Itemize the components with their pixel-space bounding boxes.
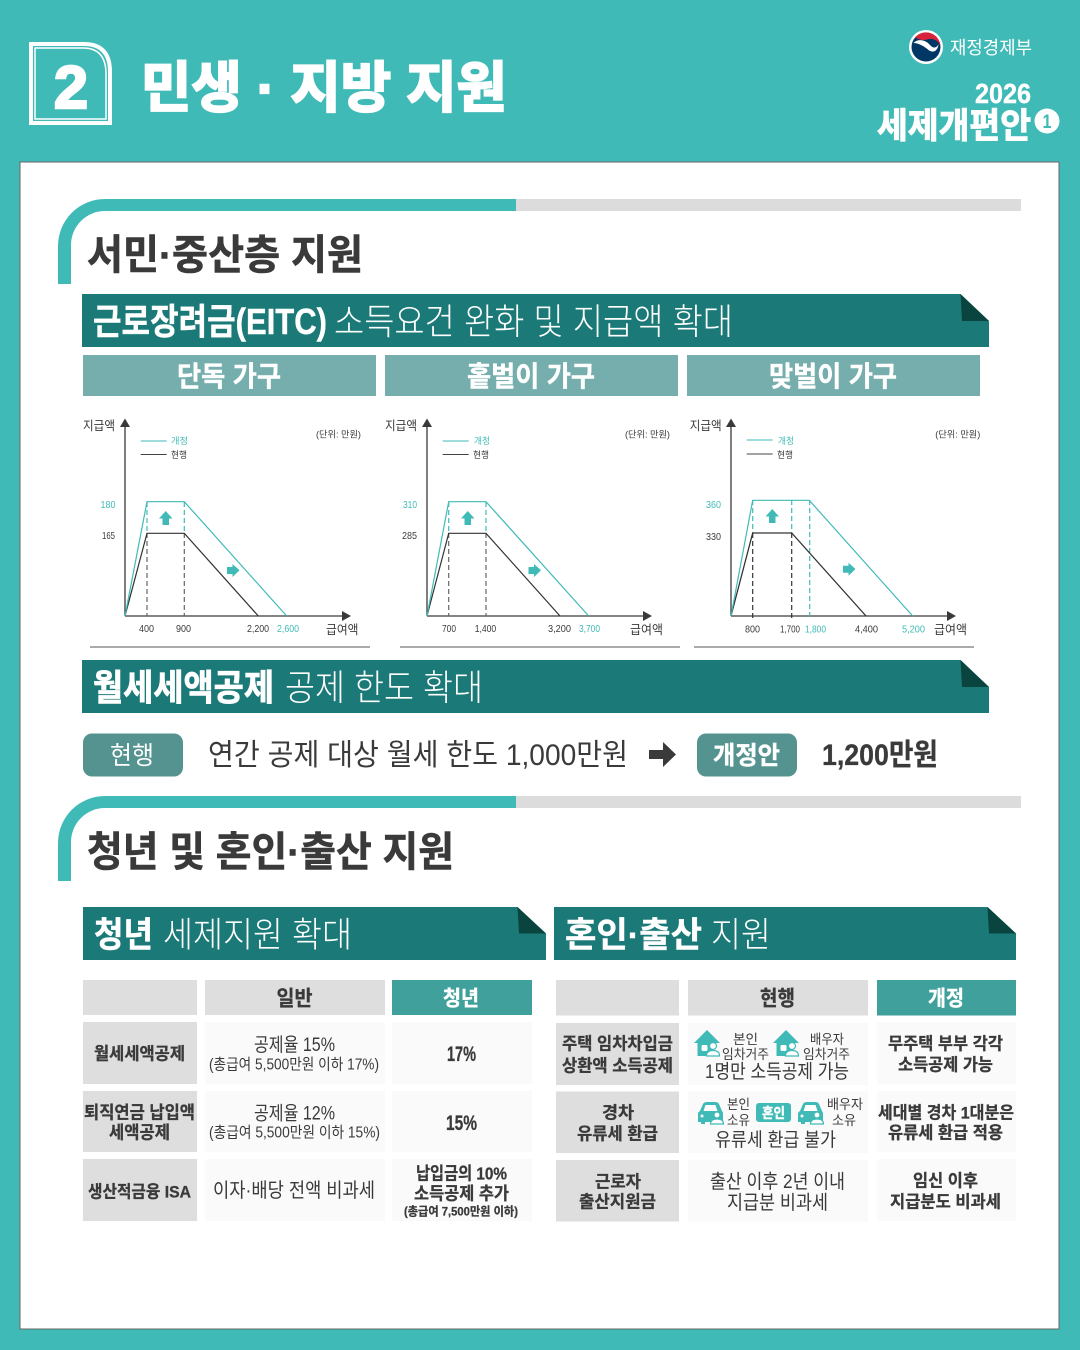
chart: single earner household: 3,200 bbox=[548, 623, 571, 635]
table: marriage and childbirth support: 배우자 bbox=[827, 1097, 864, 1112]
banner: youth tax support bbox=[83, 907, 546, 960]
heading: low and middle income support: 서민·중산층 지원 bbox=[87, 232, 363, 278]
comparison row: rent limit: 현행 bbox=[110, 742, 154, 770]
table: youth tax support: 이자·배당 전액 비과세 bbox=[213, 1179, 375, 1202]
banner: marriage and childbirth support: 지원 bbox=[711, 916, 771, 955]
chart: single household: 현행 bbox=[171, 449, 187, 460]
series label bbox=[877, 78, 1060, 146]
table: marriage and childbirth support: 유류세 환급 bbox=[577, 1124, 658, 1144]
chart: dual earner household: 현행 bbox=[777, 449, 793, 460]
table: youth tax support: 공제율 15% bbox=[254, 1034, 335, 1056]
table: marriage and childbirth support: 소유 bbox=[727, 1113, 750, 1128]
table: marriage and childbirth support: 출산지원금 bbox=[579, 1192, 656, 1212]
chart: single earner household: 급여액 bbox=[630, 623, 663, 637]
chart: single household: 개정 bbox=[171, 436, 188, 446]
table: youth tax support: 생산적금융 ISA bbox=[88, 1182, 191, 1202]
chart: single earner household: 1,400 bbox=[475, 623, 496, 635]
table: youth tax support bbox=[83, 980, 532, 1221]
icon: house, applicant bbox=[694, 1030, 720, 1056]
comparison row: rent limit: 1,200만원 bbox=[822, 739, 938, 772]
chart: dual earner household: 4,400 bbox=[855, 624, 878, 636]
sub header: single household bbox=[83, 355, 376, 396]
chart: dual earner household: 330 bbox=[706, 531, 721, 543]
table: marriage and childbirth support: 상환액 소득공제 bbox=[562, 1056, 673, 1076]
chart: single household: (단위: 만원) bbox=[316, 430, 361, 440]
table: marriage and childbirth support: 소득공제 가능 bbox=[898, 1056, 993, 1074]
chart: single household: 180 bbox=[100, 499, 116, 511]
banner: youth tax support: 청년 bbox=[94, 916, 153, 955]
table: marriage and childbirth support: 무주택 부부 각각 bbox=[888, 1034, 1003, 1054]
table: marriage and childbirth support bbox=[556, 980, 1016, 1222]
table: marriage and childbirth support: 세대별 경차 1대분은 bbox=[878, 1104, 1014, 1122]
table: youth tax support: (총급여 5,500만원 이하 17%) bbox=[209, 1056, 379, 1074]
title: 민생 · 지방 지원 bbox=[141, 57, 507, 119]
badge: marriage: 혼인 bbox=[762, 1105, 785, 1121]
banner: EITC: 소득요건 완화 및 지급액 확대 bbox=[334, 301, 733, 342]
series label: 1 bbox=[1042, 112, 1052, 133]
chart: dual earner household: 360 bbox=[706, 499, 721, 511]
chart: dual earner household: 급여액 bbox=[934, 623, 967, 637]
comparison row: rent limit bbox=[83, 734, 938, 776]
chart: single household: 2,600 bbox=[277, 623, 299, 635]
chart: single earner household: 현행 bbox=[473, 449, 489, 460]
table: marriage and childbirth support: 지급분도 비과세 bbox=[890, 1192, 1001, 1212]
table: marriage and childbirth support: 출산 이후 2년 이내 bbox=[710, 1171, 845, 1193]
table: marriage and childbirth support: 경차 bbox=[602, 1104, 634, 1122]
chart: single earner household: 개정 bbox=[474, 436, 490, 446]
table: marriage and childbirth support: 배우자 bbox=[810, 1032, 845, 1047]
table: youth tax support: 납입금의 10% bbox=[416, 1164, 507, 1184]
table: youth tax support: 퇴직연금 납입액 bbox=[84, 1102, 195, 1122]
chart: single household bbox=[83, 418, 370, 648]
banner: monthly rent credit: 공제 한도 확대 bbox=[285, 667, 483, 708]
table: youth tax support: 공제율 12% bbox=[254, 1102, 335, 1124]
table: youth tax support: (총급여 5,500만원 이하 15%) bbox=[209, 1124, 380, 1142]
table: marriage and childbirth support: 1명만 소득공제 가능 bbox=[705, 1061, 849, 1083]
table: marriage and childbirth support: 주택 임차차입금 bbox=[562, 1034, 673, 1054]
chart: dual earner household: 5,200 bbox=[902, 624, 925, 636]
chart: single earner household: 3,700 bbox=[579, 623, 600, 635]
banner: EITC bbox=[82, 294, 989, 347]
table: marriage and childbirth support: 임차거주 bbox=[722, 1047, 769, 1062]
table: marriage and childbirth support: 본인 bbox=[733, 1032, 758, 1047]
chart: dual earner household: 개정 bbox=[778, 436, 794, 446]
chart: single household: 400 bbox=[139, 623, 154, 635]
chart: single earner household: (단위: 만원) bbox=[625, 430, 670, 440]
chart: dual earner household: 1,700 bbox=[780, 624, 800, 636]
banner: monthly rent credit bbox=[82, 660, 989, 713]
icon: car, spouse bbox=[798, 1102, 824, 1124]
chart: single earner household: 700 bbox=[442, 623, 456, 635]
sub header: single earner household bbox=[385, 355, 678, 396]
icon: government emblem bbox=[909, 30, 943, 64]
ministry name: 재정경제부 bbox=[950, 38, 1032, 58]
table: marriage and childbirth support: 현행 bbox=[760, 988, 795, 1010]
table: marriage and childbirth support: 소유 bbox=[832, 1113, 856, 1128]
table: marriage and childbirth support: 임신 이후 bbox=[913, 1172, 978, 1190]
chart: single earner household: 지급액 bbox=[385, 419, 417, 433]
banner: youth tax support: 세제지원 확대 bbox=[163, 916, 352, 955]
table: marriage and childbirth support: 지급분 비과세 bbox=[727, 1192, 828, 1214]
banner: monthly rent credit: 월세세액공제 bbox=[93, 667, 274, 708]
sub header: dual earner household bbox=[687, 355, 980, 396]
table: youth tax support: 월세세액공제 bbox=[94, 1044, 185, 1064]
chart: single earner household: 310 bbox=[403, 499, 417, 511]
table: youth tax support: 소득공제 추가 bbox=[414, 1184, 509, 1204]
icon: house, spouse bbox=[773, 1030, 799, 1056]
table: marriage and childbirth support: 유류세 환급 적용 bbox=[888, 1124, 1003, 1142]
table: marriage and childbirth support: 근로자 bbox=[595, 1172, 641, 1192]
badge: marriage bbox=[756, 1103, 791, 1122]
chart: single household: 급여액 bbox=[326, 623, 358, 637]
banner: marriage and childbirth support bbox=[554, 907, 1016, 960]
banner: marriage and childbirth support: 혼인·출산 bbox=[565, 916, 702, 955]
chart: dual earner household: 800 bbox=[745, 624, 760, 636]
chart: single earner household bbox=[385, 418, 680, 648]
sub header: dual earner household: 맞벌이 가구 bbox=[769, 361, 897, 392]
table: youth tax support: 15% bbox=[446, 1112, 477, 1135]
table: youth tax support: (총급여 7,500만원 이하) bbox=[404, 1204, 518, 1218]
chart: dual earner household bbox=[690, 418, 980, 648]
chart: single household: 165 bbox=[102, 530, 115, 542]
table: youth tax support: 청년 bbox=[443, 988, 479, 1010]
chart: dual earner household: 1,800 bbox=[805, 624, 826, 636]
table: youth tax support: 세액공제 bbox=[109, 1122, 170, 1142]
chart: dual earner household: 지급액 bbox=[690, 419, 722, 433]
table: youth tax support: 일반 bbox=[276, 988, 312, 1010]
table: marriage and childbirth support: 유류세 환급 불가 bbox=[715, 1129, 836, 1151]
comparison row: rent limit: 개정안 bbox=[713, 742, 780, 770]
table: youth tax support: 17% bbox=[447, 1043, 476, 1066]
banner: EITC: 근로장려금(EITC) bbox=[93, 301, 327, 342]
series label: 세제개편안 bbox=[877, 107, 1031, 146]
table: marriage and childbirth support: 본인 bbox=[727, 1097, 750, 1112]
comparison row: rent limit: 연간 공제 대상 월세 한도 1,000만원 bbox=[208, 739, 628, 772]
chart: single household: 지급액 bbox=[83, 419, 115, 433]
section bracket 2 bbox=[58, 796, 1021, 881]
icon: car, applicant bbox=[698, 1102, 724, 1124]
chart: single earner household: 285 bbox=[402, 530, 417, 542]
header: section number badge: 2 bbox=[54, 54, 88, 121]
chart: single household: 2,200 bbox=[247, 623, 269, 635]
chart: dual earner household: (단위: 만원) bbox=[935, 430, 980, 440]
sub header: single household: 단독 가구 bbox=[177, 361, 281, 392]
sub header: single earner household: 홑벌이 가구 bbox=[467, 361, 595, 392]
section bracket 1 bbox=[58, 199, 1021, 284]
header: section number badge bbox=[31, 44, 110, 123]
chart: single household: 900 bbox=[176, 623, 191, 635]
table: marriage and childbirth support: 개정 bbox=[928, 988, 964, 1010]
table: marriage and childbirth support: 임차거주 bbox=[803, 1047, 850, 1062]
series label: 2026 bbox=[975, 78, 1031, 109]
heading: youth, marriage and childbirth support: 청년 및 혼인·출산 지원 bbox=[87, 829, 454, 875]
